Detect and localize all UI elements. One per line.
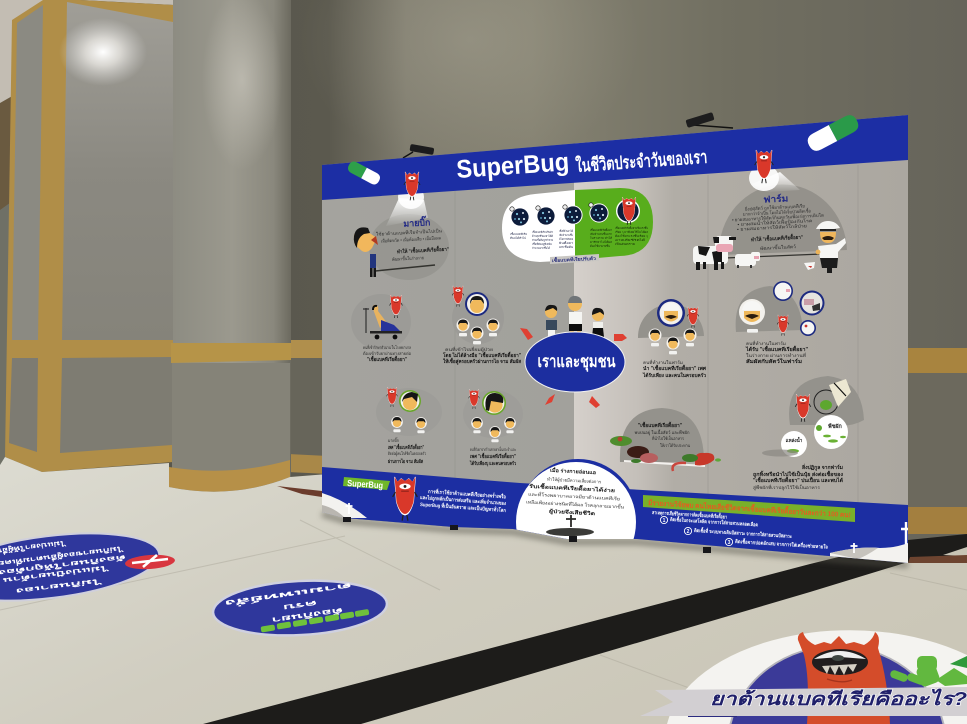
pill text: เชื้อที่ยังอยู่จึงเพิ่ม — [532, 242, 552, 246]
body text: • ยาผสมอาหารให้สัตว์ใกล้ป่วย — [737, 223, 808, 232]
lamp left — [403, 144, 434, 158]
caption: ผ่านการไอ จาม สัมผัส — [388, 458, 424, 465]
pill text: ส่วนเชื้ออื่นถูกทำลาย — [532, 238, 553, 242]
pill text: จำนวนมากขึ้นได้ — [532, 246, 550, 250]
dome text: และที่โรงพยาบาลอาจมียาต้านแบคทีเรีย — [528, 491, 621, 501]
caption: ได้รับเพียง และคนในครอบครัว — [642, 372, 706, 379]
grave — [546, 515, 594, 536]
dome shade: personal use — [369, 214, 449, 280]
caption: "เชื้อแบคทีเรียดื้อยา" — [367, 354, 408, 363]
pill text: เชื้อแบคทีเรียปรับตัว — [532, 230, 553, 234]
heading: มายบิ๊ก — [403, 215, 431, 229]
body text: เมื่อติดหวัด • เมื่อท้องเสีย • เมื่อมีแผล — [381, 234, 441, 244]
pill icon: right — [805, 112, 861, 154]
green statistic banner: มีรายงานวิจัยพบ คนไทยเสียชีวิตจากเชื้อแบคทีเรียดื้อยาวันละกว่า 100 คน! — [648, 496, 851, 519]
pill text: เป็นอันตราย — [615, 241, 635, 246]
cause 3 — [725, 536, 828, 551]
chicken — [804, 262, 815, 270]
caption: คนที่เข้ารักษาตัวนาน ในโรงพยาบาล — [363, 344, 411, 350]
pill text: ที่พบได้ทั่วไป — [510, 236, 526, 240]
heading: ฟาร์ม — [763, 192, 789, 205]
big bug mascot — [393, 477, 417, 521]
pill text: ในร่างกาย ทำให้ — [590, 236, 612, 240]
pill text: เชื้อแบคทีเรียดื้อยาแข็งแรงขึ้น — [615, 225, 648, 230]
pill text: อาจเสียชีวิตได้ — [615, 238, 645, 242]
caption: ให้เชื้อสู่ครอบครัวผ่านการไอ จาม สัมผัส — [443, 356, 522, 366]
round column — [169, 0, 291, 492]
small faces — [648, 328, 662, 346]
green pills — [889, 656, 967, 688]
arrows — [520, 328, 627, 408]
pill text: ต้องใช้ยาแรงขึ้น — [590, 244, 610, 248]
title: ในชีวิตประจำวันของเรา — [575, 146, 708, 176]
bug icon — [452, 286, 464, 307]
caption: ได้รับเพียงบุ และคนครอบครัว — [469, 460, 516, 467]
banner shadow on floor — [322, 514, 908, 565]
caption: เพศ "เชื้อแบคทีเรียดื้อยา" — [388, 442, 424, 451]
dome text: รับเชื้อแบคทีเรียดื้อยาได้ง่าย — [529, 481, 615, 494]
dome text: ผู้ป่วยจึงเสียชีวิต — [549, 508, 595, 518]
node: friends around patient — [442, 286, 522, 366]
node: girl — [463, 389, 523, 467]
bottom band — [322, 467, 909, 570]
body text: ทำให้ "เชื้อแบคทีเรียดื้อยา" — [751, 232, 804, 243]
SuperBug banner — [322, 112, 909, 582]
body text: • ยาผสมอาหารให้สัตว์กินทุกวันเพื่อเร่งการเติบโต — [732, 212, 824, 223]
bug icon — [795, 394, 811, 422]
bottom right cause list — [652, 507, 828, 551]
green dashes — [261, 609, 369, 633]
panel background — [322, 115, 908, 563]
body text: พัฒนาขึ้นในร่างกาย — [392, 254, 424, 262]
section: farm — [693, 150, 846, 273]
patient — [363, 305, 402, 339]
face — [399, 390, 421, 412]
caption: สู่พืชผักที่เราปลูกไว้ใช้เป็นอาหาร — [753, 483, 821, 491]
bug icon — [687, 307, 699, 328]
sticker text: ไม่กินยาของผู้อื่นตามที่เคย — [0, 544, 124, 569]
title — [455, 146, 708, 184]
node: bucket waste — [753, 376, 864, 491]
cow — [693, 236, 736, 270]
sticker text — [224, 581, 353, 625]
cause 3: ติดเชื้อจากปอดอักเสบ จากการใส่เครื่องช่วยหายใจ — [735, 536, 828, 551]
caption — [469, 445, 517, 467]
caption: ให้เราได้รับประทาน — [660, 443, 690, 448]
dome text: เมื่อ ร่างกายอ่อนแอ — [550, 466, 596, 476]
meat — [627, 446, 658, 463]
bug circle — [616, 197, 640, 225]
pill text: ยารักษาไม่ได้ผล — [590, 240, 612, 244]
caption: เพศ "เชื้อแบคทีเรียดื้อยา" — [470, 451, 517, 460]
farmer — [816, 221, 846, 273]
pill caption: เชื้อแบคทีเรียปรับตัว — [552, 254, 596, 263]
dome text: เหลือเพียงอย่างชนิดที่ได้ผล โรคลุกลามมากขึ้น — [526, 498, 624, 511]
caption: สัมผัสกับสัตว์ในฟาร์ม — [746, 358, 802, 365]
character: man — [354, 227, 378, 277]
sticker text: ต้องกินยา — [271, 606, 344, 625]
caption — [634, 420, 690, 448]
pill text: แก่เชื้ออื่น — [559, 245, 573, 249]
pill text — [510, 225, 649, 250]
caption — [442, 346, 522, 366]
bug icon — [777, 315, 789, 336]
bottom left text: การที่เราใช้ยาต้านแบคทีเรียอย่างพร่ำเพรื่อ — [428, 487, 506, 500]
SuperBug tag: SuperBug — [347, 478, 383, 491]
left wall pier with gold frame — [5, 0, 173, 472]
caption: คนที่ทำงานในฟาร์ม — [746, 340, 786, 346]
dome text — [526, 466, 624, 518]
floor sticker: take full course — [212, 576, 388, 640]
people — [545, 296, 604, 344]
monster — [798, 632, 890, 724]
sticker text: ครบ — [282, 599, 318, 612]
spotlight right — [749, 165, 800, 192]
cause 1 — [660, 514, 758, 528]
caption: ได้รับ "เชื้อแบคทีเรียดื้อยา" — [745, 344, 809, 353]
small faces — [471, 417, 483, 433]
sticker text: ไม่กินยาเอง — [15, 577, 103, 596]
pill infographic — [502, 188, 653, 264]
section: my big personal use — [354, 172, 450, 277]
caption: ในร่างกาย ผ่านการทำงานที่ — [746, 352, 806, 358]
floor tile joints — [0, 520, 967, 692]
salad — [610, 436, 632, 446]
lamp right — [685, 112, 733, 128]
caption: คนที่เข้าไปเยี่ยมผู้ป่วย — [445, 346, 494, 353]
vegetable and chilli — [673, 453, 721, 471]
cause 1: ติดเชื้อในกระแสโลหิต จากการใส่สายสวนหลอดเลือด — [670, 514, 758, 528]
node: community centre — [520, 296, 627, 408]
red cross badge — [125, 553, 175, 571]
cause 2 — [684, 525, 792, 540]
body text: พัฒนาขึ้นในสัตว์ — [760, 243, 797, 251]
node: food — [610, 408, 721, 471]
sheep circle — [773, 281, 793, 301]
body text: ใช้ยาต้านแบคทีเรียจำเป็นไปเป็น — [376, 226, 442, 237]
brown inlay strip right — [908, 555, 967, 563]
cause 2: ติดเชื้อที่ ระบบทางเดินปัสสาวะ จากการใส่สายสวนปัสสาวะ — [694, 525, 792, 540]
caption — [388, 437, 426, 465]
pill text: มีโอกาสส่งต่อ — [559, 237, 573, 241]
caption: ติดต่อผู้คนใกล้ชิดในครอบครัว — [388, 451, 426, 457]
dome text: ทำให้ผู้ป่วยมีความเสี่ยงต่อการ — [547, 476, 602, 485]
sticker text — [0, 538, 126, 596]
pill text: เชื้อแบคทีเรียดื้อยา — [590, 228, 612, 232]
floor — [0, 457, 967, 724]
cause 3: 3 — [728, 540, 731, 546]
caption: มายบิ๊ก — [388, 437, 399, 443]
bug icon — [404, 172, 420, 200]
caption: ถูกทิ้งหรือนำไปใช้เป็นปุ๋ย ส่งต่อเชื้อของ — [753, 469, 844, 479]
pill text: เชื้อแบคทีเรีย — [510, 232, 527, 236]
small faces — [391, 416, 403, 432]
body text: • ยาผสมน้ำให้สัตว์เพื่อป้องกันโรค — [737, 217, 813, 227]
floor wedge right — [943, 547, 967, 556]
bug icon — [755, 150, 773, 183]
caption: พบปนอยู่ ในเนื้อสัตว์ และพืชผัก — [634, 429, 690, 436]
pill text: เรื่อย ๆ ยาที่เคยใช้ไม่ได้ผล — [615, 230, 648, 235]
pill text: ต้านฤทธิ์ของยาได้ดี — [532, 234, 553, 238]
sticker text: ตามแพทย์สั่ง — [224, 581, 353, 609]
ribbon: ยาต้านแบคทีเรียคืออะไร? — [710, 688, 967, 709]
ribbon — [640, 687, 967, 717]
body text: ทำให้ "เชื้อแบคทีเรียดื้อยา" — [397, 244, 450, 255]
bug icon — [390, 295, 402, 318]
caption — [363, 344, 411, 363]
caption: ที่นำไปใช้เป็นอาหาร — [652, 434, 685, 441]
dome shade: farm — [719, 184, 847, 255]
body text — [732, 202, 824, 251]
caption — [642, 359, 707, 379]
node: hospital patient — [351, 294, 411, 363]
germ circles — [510, 207, 530, 227]
face — [482, 391, 506, 415]
caption: โดย ไม่ได้ล้างมือ "เชื้อแบคทีเรียดื้อยา" — [442, 350, 522, 359]
chicken circle — [800, 320, 816, 336]
caption: "เชื้อแบคทีเรียดื้อยา" ปนเปื้อน และพบได้ — [753, 475, 843, 484]
brown inlay strip under column — [277, 486, 322, 497]
vegetable circle: พืชผัก — [827, 423, 842, 430]
centre dome message — [516, 459, 636, 539]
bottom left text: SuperBug ที่เป็นอันตราย และเป็นปัญหาทั่วโลก — [420, 500, 506, 514]
small faces — [456, 318, 470, 336]
caption: สิ่งปฏิกูล จากฟาร์ม — [802, 463, 843, 472]
caption: คนที่รับยาจากร้านขายยาเป็นประจำ และ — [470, 445, 516, 452]
bug icon — [387, 387, 397, 407]
node: elder woman — [376, 387, 442, 465]
pill text: ยีนดื้อยา — [559, 241, 574, 245]
caption: ต้องเข้ารับยาผ่านทางสายต่อ — [363, 351, 411, 356]
pill text: เพิ่มจำนวนขึ้นมาก — [590, 232, 612, 236]
hill right — [830, 522, 908, 563]
central oval: เราและชุมชน — [538, 352, 616, 372]
sheep — [735, 252, 760, 268]
caption: นำ "เชื้อแบคทีเรียดื้อยา" เพศ — [643, 363, 707, 372]
bottom left text — [420, 487, 507, 514]
spotlight left — [386, 185, 428, 226]
caption: "เชื้อแบคทีเรียดื้อยา" — [638, 420, 683, 429]
bottom left text: และไม่ถูกหลักเป็นการส่งเสริม และเพิ่มจำนวนของ — [420, 493, 507, 508]
face — [739, 299, 765, 333]
cause 2: 2 — [687, 529, 690, 535]
floor sticker: what is antibiotic resistance — [640, 630, 967, 724]
body text — [376, 226, 450, 262]
wall rail and skirting — [288, 340, 967, 534]
caption — [753, 463, 844, 491]
node: farm contact — [736, 281, 824, 365]
water circle: แหล่งน้ำ — [786, 436, 803, 443]
bug icon — [469, 389, 479, 409]
floor sticker: do not — [0, 523, 175, 611]
title: SuperBug — [455, 148, 570, 184]
caption — [745, 340, 809, 365]
sticker text: ต้องกินยาให้ถูกต้อง — [0, 553, 126, 577]
cow circle — [800, 290, 824, 316]
bottom right cause list: สาเหตุการเสียชีวิตจากการติดเชื้อแบคทีเรียดื้อยา — [652, 507, 727, 521]
pill icon: left — [346, 160, 382, 186]
face — [657, 299, 685, 327]
pill text: ต้องใช้ยาแรงขึ้นเรื่อย ๆ — [615, 234, 649, 239]
node: farm worker — [638, 299, 707, 379]
cause 1: 1 — [663, 518, 666, 524]
background wall — [0, 0, 967, 540]
caption: คนที่ทำงานในฟาร์ม — [643, 359, 683, 365]
face — [465, 292, 489, 316]
bucket — [814, 379, 851, 414]
body text: มากกว่าจำเป็น โดยไม่ได้เจ็บป่วยติดเชื้อ — [743, 206, 811, 217]
sticker text: ไม่แบ่งปันยาต้าน — [1, 564, 110, 585]
banner feet — [343, 517, 711, 553]
body text: ยิ่งปศุสัตว์ ถูกใช้ยาต้านแบคทีเรีย — [744, 202, 805, 213]
pill text: เชื้อที่ต้านยาได้ — [559, 229, 573, 233]
pill caption — [550, 254, 599, 264]
black floor stripe — [203, 534, 967, 724]
sticker text: ไม่แบ่งยาให้ผู้อื่น — [0, 538, 67, 557]
hill left — [322, 493, 367, 518]
pill text: เพิ่มจำนวนขึ้น — [559, 233, 573, 237]
header band — [322, 115, 908, 200]
